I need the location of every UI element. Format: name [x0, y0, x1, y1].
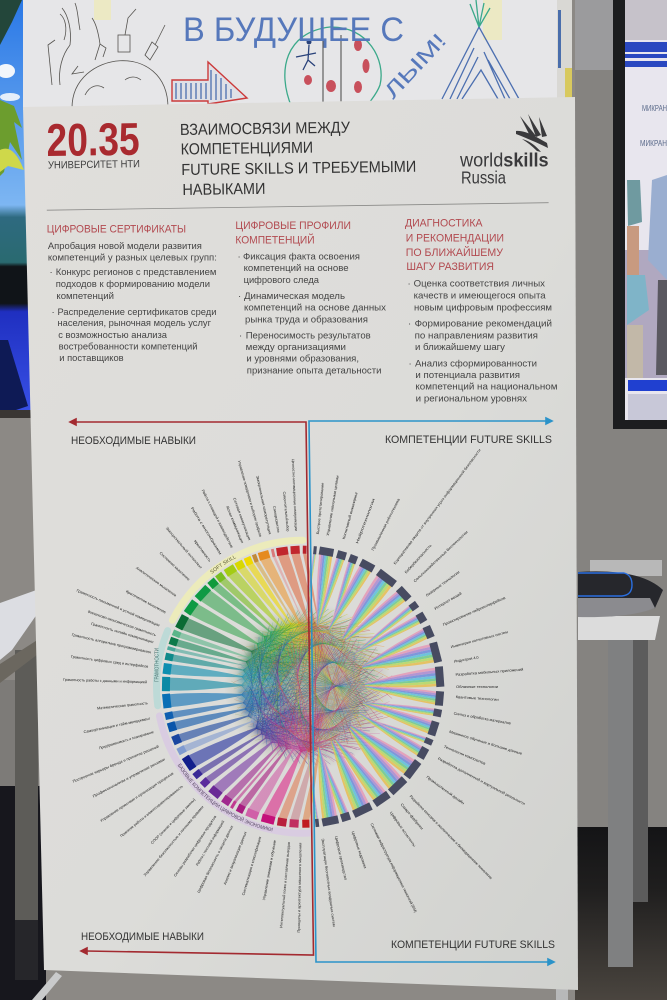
- column 2: digital competency profiles: признание опыта детальности: [247, 365, 381, 376]
- column 2: digital competency profiles: цифрового следа: [244, 275, 320, 286]
- left labels: required skills: Работа с командой и взаимодействие: [201, 489, 234, 549]
- right labels: future skills competencies: Кибербезопасность: [404, 543, 432, 574]
- left labels: required skills: Управление проектами и организация процессов: [100, 772, 174, 823]
- column 2: digital competency profiles: Фиксация факта освоения: [243, 251, 360, 262]
- left labels: required skills: Управление знаниями и обучение: [262, 840, 277, 901]
- right labels: future skills competencies: Управление сквозными целями: [326, 475, 340, 536]
- poster stand feet: [32, 972, 568, 1000]
- left colour wash towards mesh: [239, 617, 330, 756]
- left labels: required skills: [63, 459, 302, 933]
- column 1: digital certificates: населения, рыночная модель услуг: [58, 318, 211, 329]
- divider: [47, 203, 549, 210]
- left labels: required skills: Построение карьеры бренда и принятие решений: [72, 744, 160, 784]
- left ribbon mesh lines: [227, 583, 415, 791]
- column 3: diagnostics and recommendations: новым цифровым профессиям: [414, 302, 552, 313]
- column 1: digital certificates: компетенций у разных целевых групп:: [48, 252, 217, 264]
- column 1: digital certificates: ·: [50, 267, 53, 278]
- column 3: diagnostics and recommendations: Формирование рекомендаций: [415, 318, 552, 329]
- left labels: required skills: Саморазвитие: [272, 506, 280, 533]
- right labels: future skills competencies: Разработка мобильных приложений: [455, 668, 523, 677]
- column 3: diagnostics and recommendations: ·: [408, 318, 411, 329]
- heading: future skills top: КОМПЕТЕНЦИИ FUTURE SKILLS: [385, 434, 552, 446]
- column 3: diagnostics and recommendations: [405, 218, 558, 404]
- column 1: digital certificates: и поставщиков: [59, 353, 124, 364]
- left labels: required skills: Основы разработки цифровых продуктов: [173, 815, 217, 878]
- column 1: digital certificates: с возможностью анализа: [58, 330, 168, 341]
- column 3: diagnostics and recommendations: и региональном уровнях: [416, 393, 527, 404]
- title: [180, 120, 416, 199]
- column 3: diagnostics and recommendations: Оценка соответствия личных: [414, 279, 545, 290]
- column 2: digital competency profiles: между организациями: [246, 342, 346, 353]
- right labels: future skills competencies: Цифровые ассистенты: [389, 811, 417, 848]
- right ribbons: [303, 553, 438, 820]
- column 2: digital competency profiles: Динамическая модель: [244, 291, 345, 302]
- band label: soft skills: SOFT SKILLS: [210, 556, 236, 574]
- heading: ШАГУ РАЗВИТИЯ: [406, 261, 494, 273]
- right labels: future skills competencies: Промышленная робототехника: [371, 497, 401, 551]
- heading: required skills top: НЕОБХОДИМЫЕ НАВЫКИ: [71, 435, 196, 447]
- left labels: required skills: Управление поведением и выбором профиля: [237, 460, 262, 537]
- left video screen: [0, 0, 36, 418]
- left ribbons: [169, 552, 323, 822]
- left labels: required skills: Систематизация и классификация: [241, 836, 262, 896]
- left labels: required skills: Самостоятельный выбор: [282, 491, 290, 532]
- drawing: smiling planet: [48, 3, 168, 108]
- column 2: digital competency profiles: рынка труда и образования: [245, 314, 368, 325]
- left labels: required skills: Профессионализм и управление рисками: [92, 757, 166, 798]
- column 1: digital certificates: востребованности компетенций: [59, 342, 197, 352]
- right labels: future skills competencies: Смарт-фабрики: [400, 803, 424, 831]
- column 3: diagnostics and recommendations: Анализ сформированности: [415, 359, 537, 370]
- left category bands: [156, 540, 450, 833]
- right labels: future skills competencies: Облачные технологии: [456, 685, 498, 689]
- left labels: required skills: Управление безопасностью и личными правами: [143, 805, 204, 877]
- heading: И РЕКОМЕНДАЦИИ: [406, 232, 504, 244]
- left labels: required skills: Эмоциональная саморегуляция: [255, 475, 272, 535]
- left labels: required skills: Системное мышление: [159, 551, 191, 582]
- left labels: required skills: Креативность: [193, 539, 212, 563]
- column 2: digital competency profiles: ·: [238, 291, 241, 302]
- column 3: diagnostics and recommendations: ·: [408, 279, 411, 290]
- title: НАВЫКАМИ: [182, 181, 266, 199]
- right labels: future skills competencies: Эксплуатация беспилотных воздушных систем: [321, 838, 336, 927]
- column 1: digital certificates: ·: [52, 307, 55, 318]
- left labels: required skills: Финансово-экономическая грамотность: [87, 610, 156, 637]
- heading: ДИАГНОСТИКА: [405, 218, 483, 230]
- logo: 20.35 university: УНИВЕРСИТЕТ НТИ: [48, 158, 140, 171]
- heading: future skills bottom: КОМПЕТЕНЦИИ FUTURE SKILLS: [391, 939, 555, 951]
- right labels: future skills competencies: Быстрое прототипирование: [316, 482, 325, 535]
- column 1: digital certificates: подходов к формированию модели: [56, 279, 210, 290]
- right labels: future skills competencies: Инженерия когнитивных систем: [450, 630, 509, 649]
- right labels: future skills competencies: Когнитивный инжиниринг: [342, 491, 359, 540]
- logo: 20.35 university: 20.35: [46, 113, 140, 166]
- left labels: required skills: Грамотность алгоритмов программирования: [71, 633, 151, 655]
- column 1: digital certificates: [47, 224, 217, 364]
- right labels: future skills competencies: Корпоративная защита от внутренних угроз информационной безопасности: [393, 448, 482, 565]
- left labels: required skills: Цифровая безопасность и защита данных: [197, 825, 234, 894]
- left labels: required skills: Грамотность работы с данными и информацией: [63, 678, 147, 684]
- heading: ЦИФРОВЫЕ СЕРТИФИКАТЫ: [47, 224, 186, 236]
- left labels: required skills: Интеллектуальный поиск и составление выводов: [279, 842, 291, 928]
- column 3: diagnostics and recommendations: ·: [408, 359, 412, 370]
- right labels: future skills competencies: Синтез и обработка материалов: [453, 711, 511, 726]
- heading: [405, 218, 504, 273]
- right labels: future skills competencies: Проектирование нейроинтерфейсов: [442, 596, 506, 627]
- right labels: future skills competencies: Нейротехнологии: [355, 498, 376, 544]
- right labels: future skills competencies: Системная инфраструктура информационных технологий (BIM): [370, 823, 417, 913]
- right labels: future skills competencies: Цифровые кадровики: [351, 831, 367, 869]
- column 3: diagnostics and recommendations: качеств и имеющегося опыта: [414, 290, 546, 301]
- left labels: required skills: СПОР (знание и цифровые законы): [150, 798, 196, 845]
- title: FUTURE SKILLS И ТРЕБУЕМЫМИ: [181, 159, 416, 179]
- left labels: required skills: Принятие работы и клиентоориентированность: [119, 784, 184, 838]
- column 3: diagnostics and recommendations: и потенциала развития: [415, 370, 520, 381]
- right segment bars: [313, 546, 444, 827]
- column 1: digital certificates: компетенций: [56, 291, 114, 302]
- heading: required skills bottom: НЕОБХОДИМЫЕ НАВЫКИ: [81, 931, 204, 943]
- arrow: required skills top and vertical divider: [70, 419, 314, 955]
- left labels: required skills: Ясная коммуникация: [225, 505, 244, 544]
- logo: worldskills Russia: [459, 114, 549, 188]
- right labels: future skills competencies: Сельскохозяйственные биотехнологии: [413, 530, 469, 583]
- right ribbon mesh lines: [207, 590, 399, 782]
- left labels: required skills: Критическое мышление: [125, 590, 167, 614]
- column 1: digital certificates: Конкурс регионов с представлением: [56, 267, 216, 278]
- left segment bars: [162, 546, 310, 828]
- title: ВЗАИМОСВЯЗИ МЕЖДУ: [180, 120, 351, 139]
- heading: КОМПЕТЕНЦИЙ: [235, 233, 315, 246]
- left labels: required skills: Работа с текстовой информацией: [195, 820, 225, 867]
- right labels: future skills competencies: Разработка дополненной и виртуальной реальности: [437, 757, 526, 806]
- right table with device: [578, 560, 663, 967]
- right labels: future skills competencies: Цифровое производство: [334, 836, 348, 880]
- column 3: diagnostics and recommendations: по направлениям развития: [415, 330, 538, 341]
- right labels: future skills competencies: [316, 448, 526, 927]
- column 1: digital certificates: Апробация новой модели развития: [48, 241, 202, 252]
- column 2: digital competency profiles: компетенций на основе данных: [244, 303, 386, 314]
- heading: [235, 220, 351, 246]
- arrow: future skills top and vertical divider: [309, 418, 554, 965]
- left labels: required skills: Предприимчивость и планирование: [99, 730, 154, 750]
- left labels: required skills: Грамотность письменной и устной коммуникации: [76, 589, 160, 628]
- mesh base: [224, 603, 392, 771]
- column 3: diagnostics and recommendations: и ближайшему шагу: [415, 342, 505, 353]
- left labels: required skills: Сетевая коммуникация: [232, 497, 251, 541]
- left labels: required skills: Работа с многообразием: [190, 506, 223, 556]
- drawing: red arrow: [172, 62, 247, 104]
- heading: ПО БЛИЖАЙШЕМУ: [406, 246, 503, 259]
- left labels: required skills: Анализ и визуализация данных: [223, 831, 248, 886]
- column 2: digital competency profiles: ·: [239, 330, 242, 341]
- band label: base competencies: БАЗОВЫЕ КОМПЕТЕНЦИИ ЦИФРОВОЙ ЭКОНОМИКИ: [178, 763, 273, 832]
- column 2: digital competency profiles: [235, 220, 386, 376]
- left labels: required skills: Грамотность цифровых сред и интерфейсов: [71, 655, 149, 669]
- drawing: blue tent: [442, 0, 519, 99]
- title: КОМПЕТЕНЦИЯМИ: [181, 140, 313, 158]
- column 1: digital certificates: Распределение сертификатов среди: [58, 307, 216, 318]
- right labels: future skills competencies: Интернет вещей: [434, 591, 462, 611]
- left table and paper: [0, 588, 46, 980]
- column 2: digital competency profiles: Переносимость результатов: [246, 330, 371, 341]
- left labels: required skills: Математическая грамотность: [97, 701, 148, 711]
- column 2: digital competency profiles: ·: [238, 251, 241, 262]
- right labels: future skills competencies: Индустрия 4.0: [454, 656, 479, 664]
- left labels: required skills: Ценностно-мотивационные коммуникации: [291, 459, 298, 531]
- left labels: required skills: Эмоциональный интеллект: [165, 526, 203, 570]
- column 3: diagnostics and recommendations: компетенций на национальном: [415, 382, 558, 393]
- right labels: future skills competencies: Квантовые технологии: [456, 695, 499, 702]
- drawing: green circle with figure and trees: [285, 27, 381, 108]
- band label: literacy: ГРАМОТНОСТИ: [154, 648, 160, 682]
- left labels: required skills: Аналитическое мышление: [135, 566, 177, 598]
- handwritten word: ЛЫМ!: [380, 29, 451, 103]
- logo: worldskills Russia: Russia: [461, 168, 506, 188]
- column 2: digital competency profiles: и уровнями образования,: [246, 354, 359, 365]
- hand-drawn paper banner: [23, 0, 572, 110]
- column 2: digital competency profiles: компетенций на основе: [244, 263, 349, 274]
- right labels: future skills competencies: Разработка сенсоров и экологические и биомедицинские технологии: [409, 795, 493, 880]
- right labels: future skills competencies: Машинное обучение и большие данные: [449, 730, 523, 756]
- handwritten title: В БУДУЩЕЕ С: [183, 11, 404, 49]
- right labels: future skills competencies: Промышленный дизайн: [425, 775, 465, 805]
- right labels: future skills competencies: Лазерные технологии: [425, 570, 460, 598]
- heading: ЦИФРОВЫЕ ПРОФИЛИ: [235, 220, 351, 232]
- right video screen: [613, 0, 667, 429]
- left labels: required skills: Самоорганизация и тайм-менеджмент: [83, 717, 151, 734]
- left labels: required skills: Грамотность онлайн коммуникации: [91, 622, 154, 644]
- chord diagram: [63, 448, 526, 954]
- right labels: future skills competencies: Технологии композитов: [443, 745, 486, 766]
- poster panel: [23, 97, 578, 990]
- logo: worldskills Russia: worldskills: [459, 151, 549, 172]
- left labels: required skills: Принципы и архитектура машинного мышления: [297, 843, 302, 933]
